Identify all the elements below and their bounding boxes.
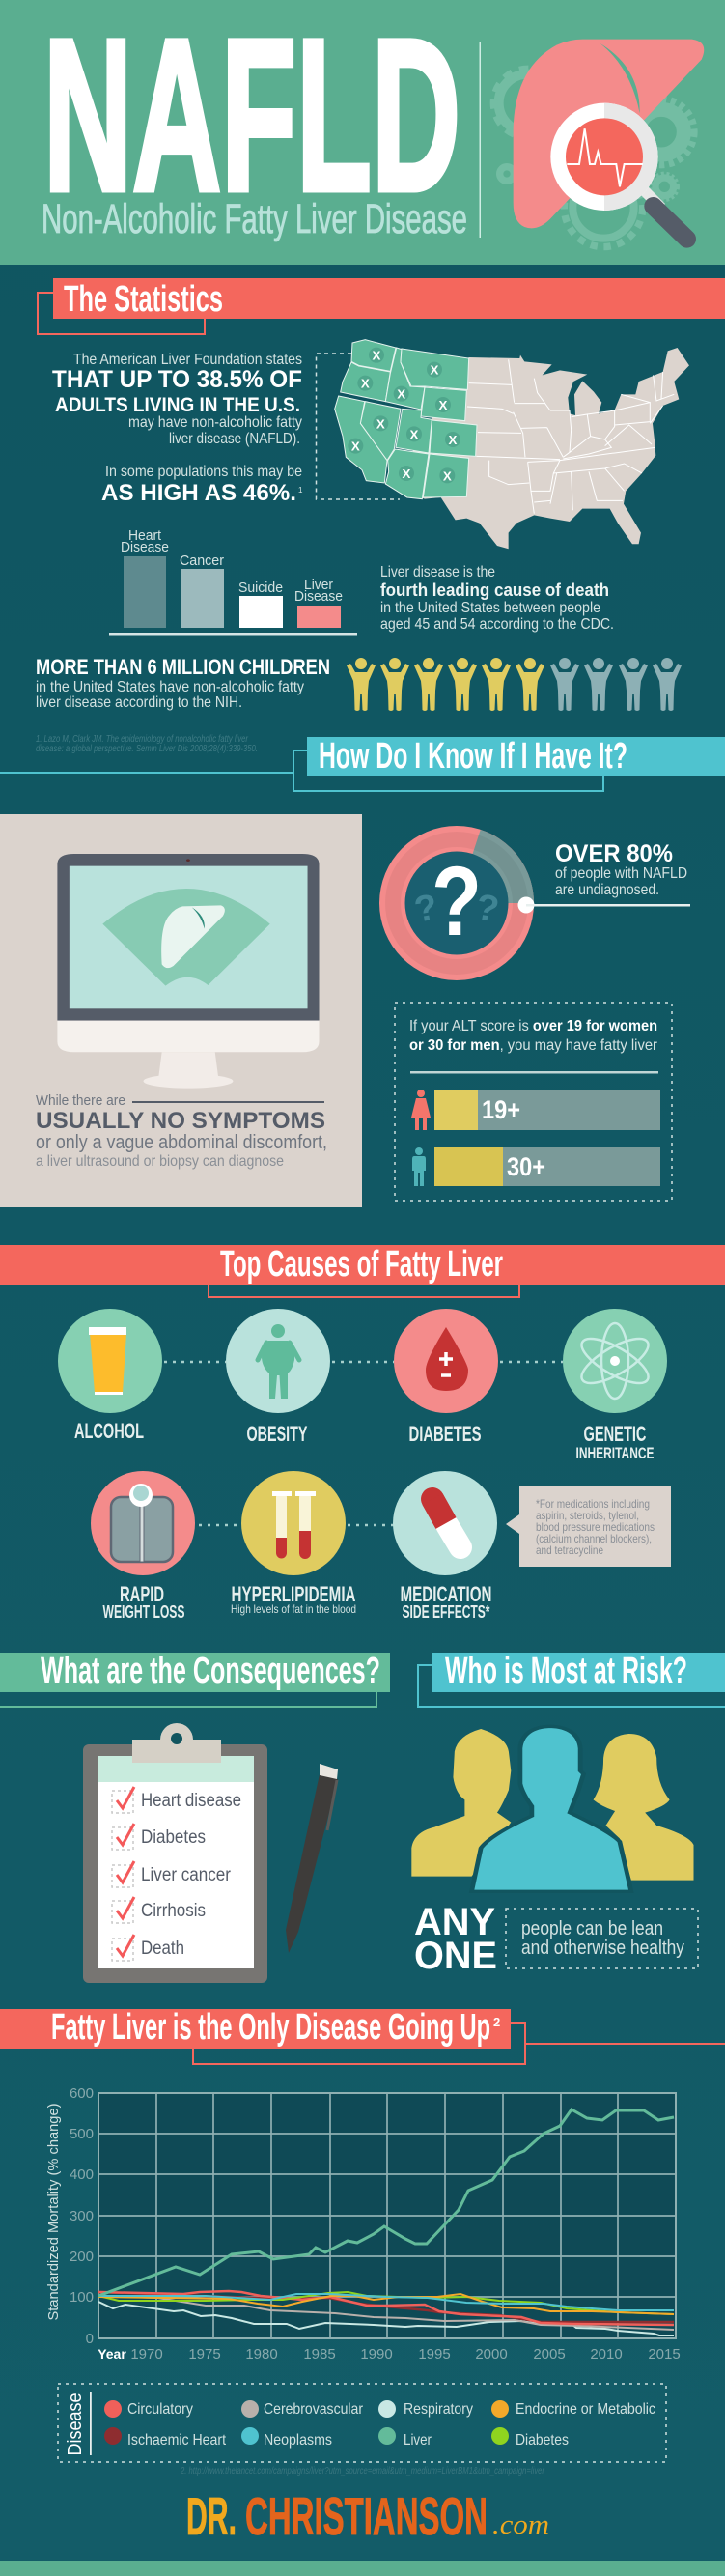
cause: hyperlipidemia: High levels of fat in the blood [231,1602,356,1616]
text block: anyone: ANY [414,1901,495,1943]
section heading: Who is Most at Risk? [418,1651,725,1707]
text block: children statistic: in the United States have non-alcoholic fatty [36,679,304,695]
legend: Respiratory [404,2401,473,2418]
text block: anyone: people can be lean [521,1918,663,1939]
cause: genetic inheritance: GENETIC [583,1422,647,1446]
text block: anyone: ONE [414,1935,497,1977]
x axis labels: Year [98,2346,126,2362]
footnote 1: disease: a global perspective. Semin Liver Dis 2008;28(4):339-350. [36,744,258,754]
bar: men 30+ [412,1147,660,1186]
text block: fourth leading cause: in the United States between people [380,600,600,616]
text block: fourth leading cause: fourth leading cause of death [380,580,609,600]
footnote 1: 1. Lazo M, Clark JM. The epidemiology of nonalcoholic fatty liver [36,734,249,745]
cause: diabetes [394,1309,498,1446]
section heading: The Statistics [38,278,725,334]
section heading: How Do I Know If I Have It? [0,736,725,791]
text block: ALT thresholds [409,1018,658,1054]
donut chart: over 80 percent undiagnosed: ? [411,887,440,931]
bar chart: leading causes of death: Suicide [238,580,283,596]
header band [0,0,725,265]
donut chart: over 80 percent undiagnosed: ? [432,846,482,956]
legend: Liver [404,2432,432,2449]
x axis labels: 2015 [648,2346,681,2363]
callout: medication note: blood pressure medications [536,1520,655,1534]
donut chart: over 80 percent undiagnosed [379,826,690,980]
logo: DR. [186,2486,237,2546]
text block: prevalence statistics: In some populations this may be [105,464,302,480]
bar: women 19+: 19+ [482,1095,520,1124]
text block: prevalence statistics [52,352,303,506]
y axis labels: 400 [70,2166,94,2183]
bar: men 30+: 30+ [507,1152,545,1181]
cause: rapid weight loss: RAPID [120,1582,164,1606]
dashed bracket beside map [317,354,400,499]
cause: hyperlipidemia [231,1471,356,1616]
text block: usually no symptoms [36,1092,327,1170]
y axis labels [70,2085,94,2347]
cause: genetic inheritance: INHERITANCE [575,1444,655,1462]
y axis labels: 0 [86,2331,94,2347]
callout: medication note [506,1486,671,1567]
text block: prevalence statistics: 1 [298,486,303,495]
y axis labels: 300 [70,2208,94,2224]
callout: medication note: *For medications including [536,1497,650,1511]
legend: Circulatory [127,2401,193,2418]
donut chart: over 80 percent undiagnosed: ? [473,887,502,931]
dotted connectors between causes [164,1362,563,1525]
map: United States with western states highlighted: X [439,398,448,412]
x axis labels: 2000 [475,2346,508,2363]
y axis labels: 200 [70,2249,94,2265]
map: United States with western states highlighted: X [443,468,452,483]
icon: three people silhouettes [411,1726,694,1891]
text block: usually no symptoms: USUALLY NO SYMPTOMS [36,1108,325,1134]
callout: medication note: and tetracycline [536,1543,603,1557]
cause: rapid weight loss: WEIGHT LOSS [102,1602,185,1622]
map: United States with western states highlighted: X [351,439,360,454]
icon: clipboard checklist of consequences [83,1723,267,1983]
logo: .com [492,2510,549,2540]
text block: prevalence statistics: THAT UP TO 38.5% OF [52,366,302,393]
icon: monitor with ultrasound of liver [57,854,320,1089]
logo: CHRISTIANSON [245,2486,488,2546]
text block: over 80 percent: are undiagnosed. [555,882,659,898]
map: United States with western states highlighted: X [361,377,370,391]
text block: usually no symptoms: While there are [36,1092,125,1109]
text block: over 80 percent: OVER 80% [555,840,673,867]
footer band [0,2561,725,2576]
icon: clipboard checklist of consequences: Cirrhosis [141,1901,206,1921]
cause: genetic inheritance [563,1309,667,1462]
legend: Ischaemic Heart [127,2432,226,2449]
x axis labels: 1995 [418,2346,451,2363]
bar chart: leading causes of death: Liver [304,577,333,593]
x axis labels: 1985 [303,2346,336,2363]
bar chart: leading causes of death: Disease [121,539,169,555]
text block: children statistic: liver disease according to the NIH. [36,694,242,711]
cause: obesity [226,1309,330,1446]
cause: obesity: OBESITY [247,1422,308,1446]
legend [58,2384,666,2462]
x axis labels: 2005 [533,2346,566,2363]
text block: prevalence statistics: AS HIGH AS 46%. [101,480,296,506]
cause: medication side effects: SIDE EFFECTS* [402,1602,490,1622]
legend: Disease [65,2393,86,2455]
map: United States with western states highlighted [335,340,689,549]
icon: clipboard checklist of consequences: Diabetes [141,1827,206,1848]
map: United States with western states highlighted: X [376,416,385,431]
x axis labels: 2010 [590,2346,623,2363]
section heading: Fatty Liver is the Only Disease Going Up [0,2007,725,2064]
text block: children statistic: MORE THAN 6 MILLION CHILDREN [36,655,330,679]
text block: fourth leading cause: Liver disease is the [380,564,495,580]
footnote 1 [36,734,258,754]
bar chart: leading causes of death: Heart [128,527,162,544]
section heading: The Statistics: The Statistics [64,279,223,320]
legend: Cerebrovascular [264,2401,364,2418]
y axis title: Standardized Mortality (% change) [45,2104,62,2320]
line chart: mortality by disease [45,2085,681,2363]
legend: Diabetes [516,2432,569,2449]
section heading: Fatty Liver is the Only Disease Going Up: 2 [493,2015,500,2029]
cause: alcohol [58,1309,162,1443]
map: United States with western states highlighted: X [403,467,411,481]
text block: over 80 percent [555,840,687,898]
section heading: What are the Consequences? [0,1651,390,1707]
map: United States with western states highlighted: X [373,349,381,363]
section heading: What are the Consequences?: What are the Consequences? [41,1651,380,1691]
icon: clipboard checklist of consequences: Death [141,1939,184,1959]
pictogram: six of ten children [347,658,682,711]
x axis labels: 1975 [188,2346,221,2363]
subtitle: Non-Alcoholic Fatty Liver Disease [42,196,467,242]
callout: medication note: aspirin, steroids, tylenol, [536,1509,639,1522]
cause: medication side effects: MEDICATION [400,1582,492,1606]
icon: clipboard checklist of consequences: Liver cancer [141,1865,232,1885]
text block: children statistic [36,655,330,711]
text block: prevalence statistics: ADULTS LIVING IN THE U.S. [55,394,300,416]
data lines [98,2109,674,2335]
callout: medication note: (calcium channel blockers), [536,1532,652,1545]
cause: medication side effects [393,1471,497,1622]
text block: over 80 percent: of people with NAFLD [555,865,687,882]
icon: clipboard checklist of consequences: Heart disease [141,1791,241,1811]
x axis labels: 1970 [130,2346,163,2363]
text block: ALT thresholds: or 30 for men, you may have fatty liver [409,1037,658,1054]
logo [186,2486,549,2546]
y axis labels: 500 [70,2126,94,2142]
bar chart: leading causes of death: Cancer [180,552,224,569]
cause: hyperlipidemia: HYPERLIPIDEMIA [232,1582,356,1606]
map: United States with western states highlighted: X [410,427,419,441]
text block: fourth leading cause: aged 45 and 54 according to the CDC. [380,616,614,633]
text block: usually no symptoms: a liver ultrasound or biopsy can diagnose [36,1153,284,1170]
y axis labels: 600 [70,2085,94,2102]
text block: prevalence statistics: liver disease (NAFLD). [169,431,300,447]
map: United States with western states highlighted: X [397,387,405,402]
bar chart: leading causes of death: Disease [294,588,343,605]
text block: prevalence statistics: may have non-alcoholic fatty [128,414,302,431]
text block: fourth leading cause [380,564,614,633]
text block: anyone: and otherwise healthy [521,1938,684,1959]
text block: prevalence statistics: The American Liver Foundation states [73,352,302,368]
text block: anyone [414,1901,698,1977]
panel: ALT score [395,1003,672,1201]
text block: usually no symptoms: or only a vague abdominal discomfort, [36,1132,327,1153]
cause: diabetes: DIABETES [409,1422,481,1446]
map: United States with western states highlighted: X [449,433,458,447]
panel: no symptoms [0,814,362,1207]
section heading: Top Causes of Fatty Liver [0,1244,725,1297]
bar: women 19+ [411,1090,660,1130]
x axis labels: 1980 [245,2346,278,2363]
legend: Endocrine or Metabolic [516,2401,655,2418]
map: United States with western states highlighted: X [431,363,439,378]
cause: rapid weight loss [91,1471,195,1622]
icon: pen [286,1764,338,1953]
cause: alcohol: ALCOHOL [74,1419,144,1443]
icon: liver under magnifying glass with gears [494,40,704,247]
x axis labels: 1990 [360,2346,393,2363]
bar chart: leading causes of death [109,527,357,636]
footnote 2: 2. http://www.thelancet.com/campaigns/liver?utm_source=email&utm_medium=LiverBM1&utm_campaign=liver [180,2466,545,2477]
section heading: Top Causes of Fatty Liver: Top Causes of Fatty Liver [220,1244,503,1285]
x axis labels [98,2346,681,2363]
legend: Neoplasms [264,2432,332,2449]
y axis labels: 100 [70,2289,94,2306]
text block: ALT thresholds: If your ALT score is over 19 for women [409,1018,657,1034]
